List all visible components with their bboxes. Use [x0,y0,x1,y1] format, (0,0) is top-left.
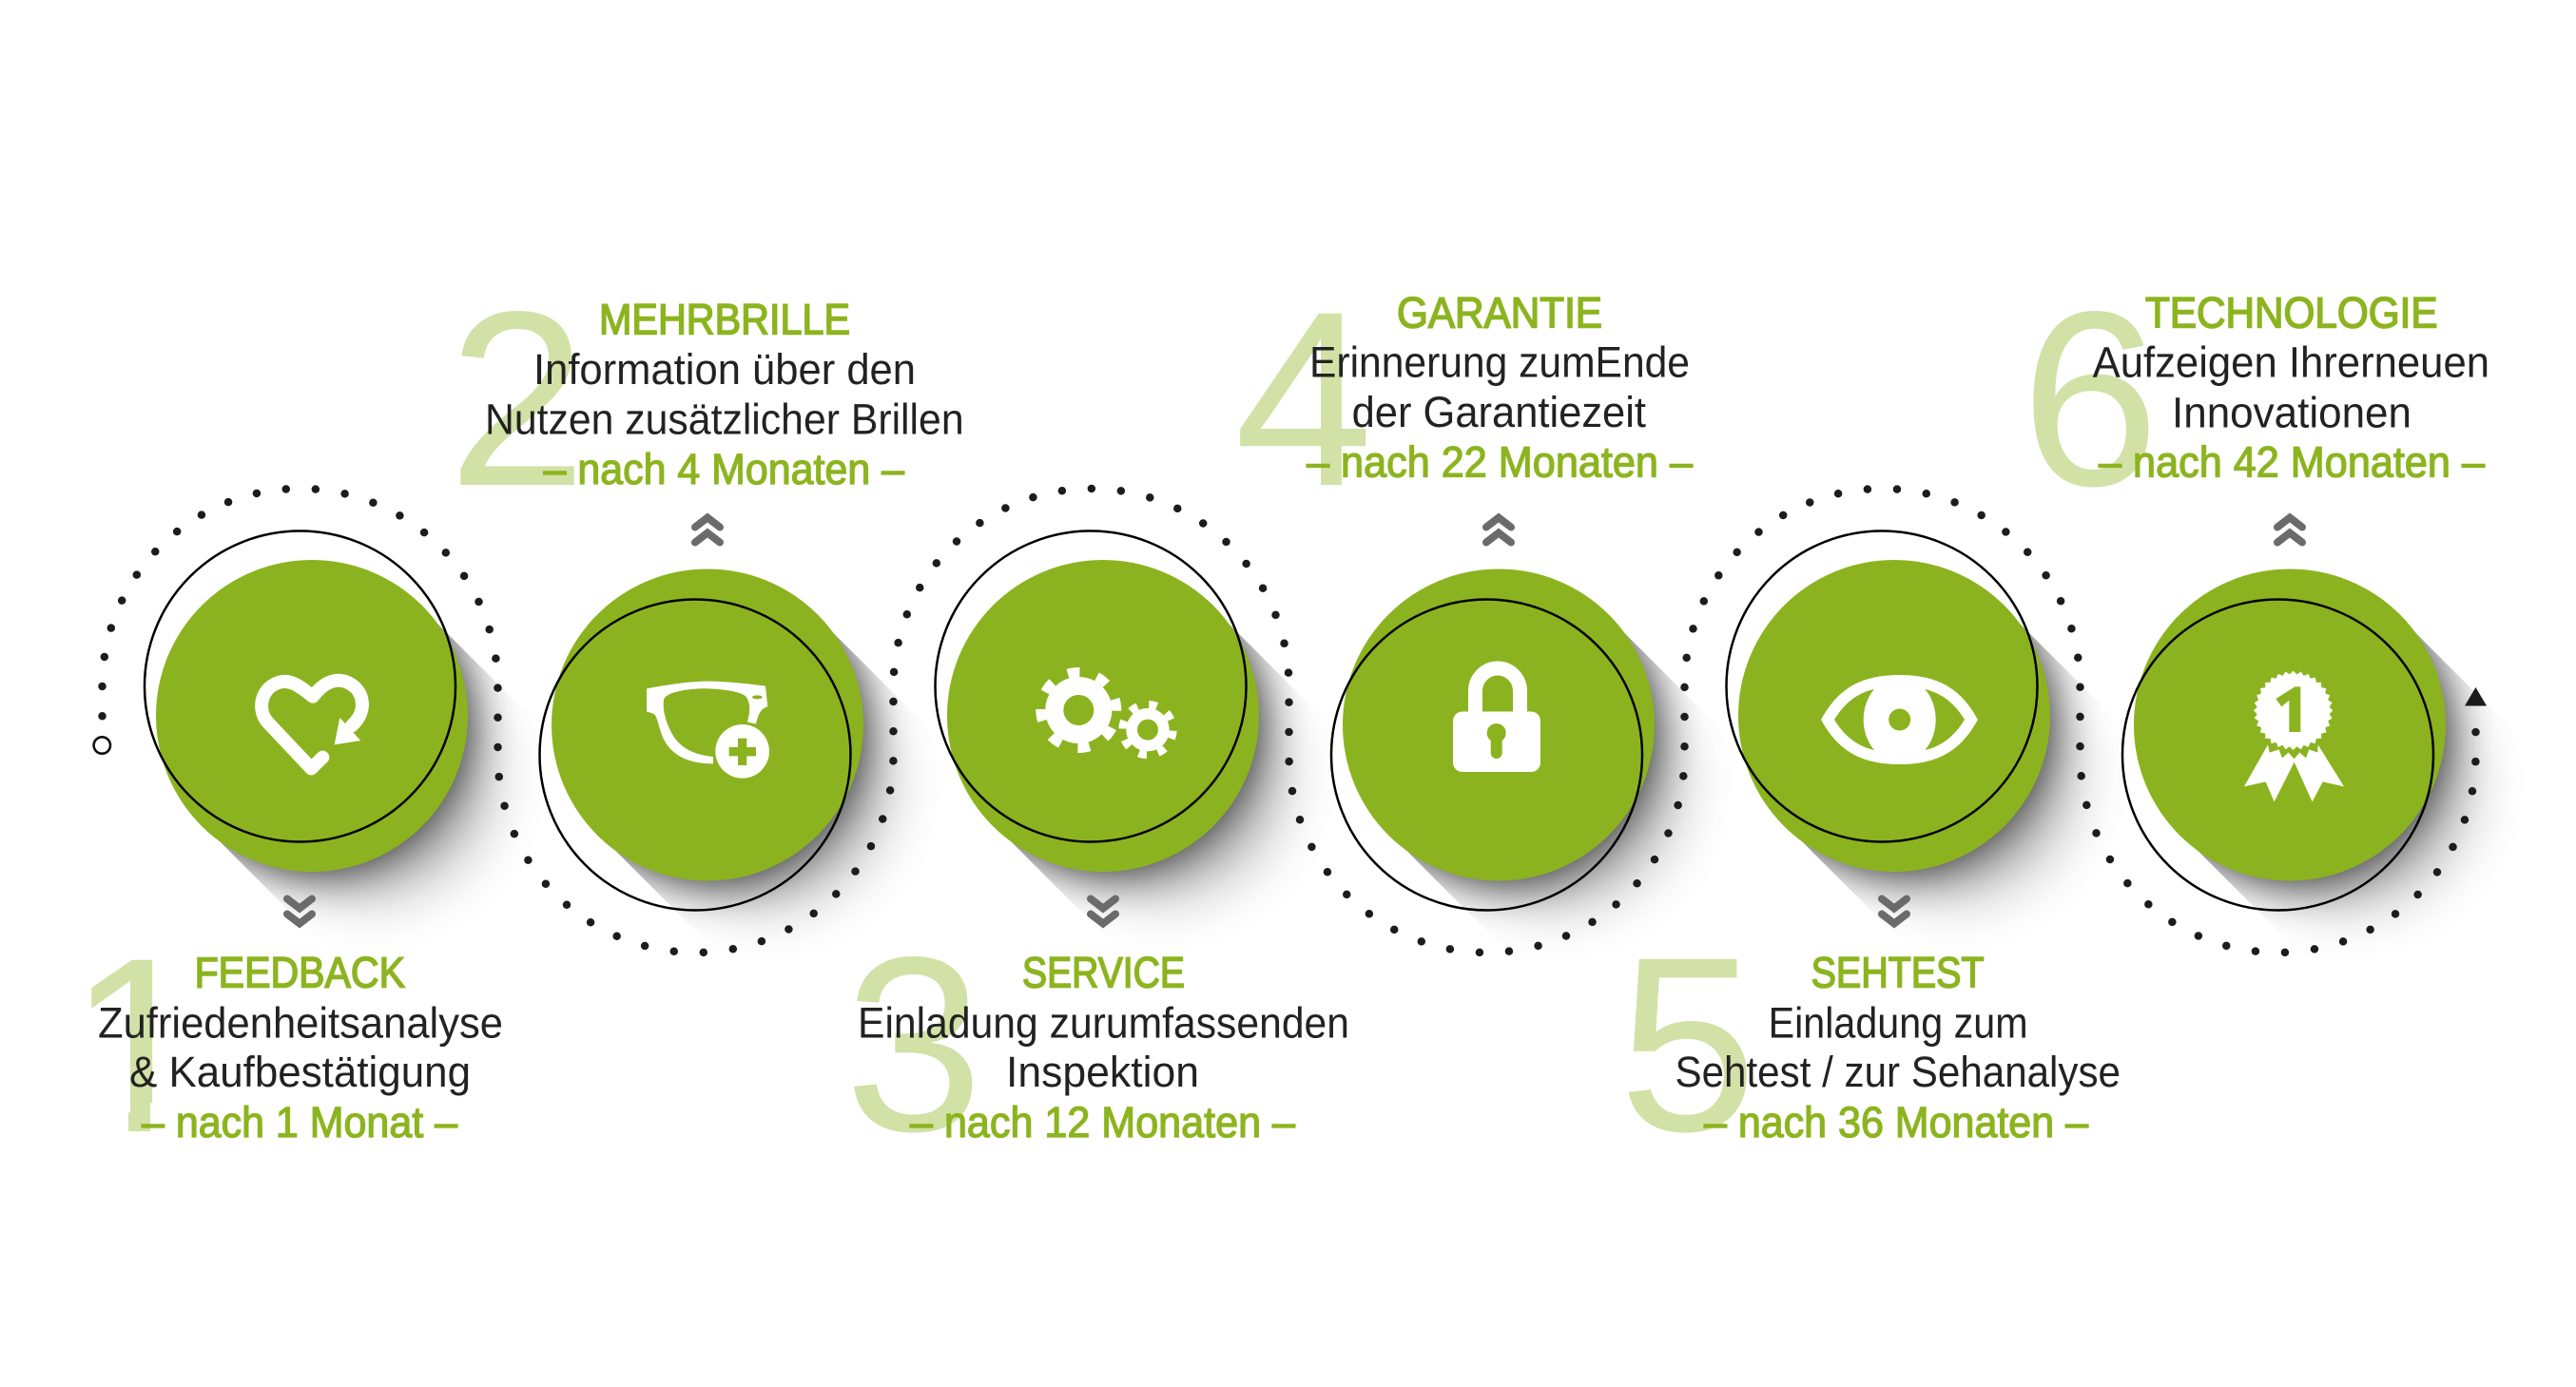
text: feedback line 2: & Kaufbestätigung [129,1048,471,1096]
numeral 3: 3 [844,905,983,1184]
ring 3 [936,530,1246,842]
numeral 6: 6 [2021,260,2160,538]
shadow 6 [2198,633,2499,934]
numeral 5: 5 [1618,905,1757,1184]
icon: padlock [1453,668,1540,772]
shadow 5 [1802,624,2103,926]
step 5: sehtest [1618,530,2121,1184]
timing: nach 22 Monaten: – nach 22 Monaten – [1307,438,1693,487]
green circle 3 [947,560,1259,872]
step 6: technologie [2021,260,2489,911]
arrow: down chevrons [287,899,312,924]
timing: nach 4 Monaten: – nach 4 Monaten – [544,445,904,493]
heading: garantie: GARANTIE [1397,288,1602,337]
text: sehtest line 1: Einladung zum [1769,999,2028,1048]
ring 1 [145,530,455,842]
step 4: garantie [1234,260,1693,911]
arrow: down chevrons [1091,899,1115,924]
heading: service: SERVICE [1022,949,1185,997]
timing: nach 12 Monaten: – nach 12 Monaten – [910,1098,1295,1146]
green circle 4 [1343,568,1655,880]
green circle 2 [552,568,863,880]
text: sehtest line 2: Sehtest / zur Sehanalyse [1675,1048,2121,1096]
heading: technologie: TECHNOLOGIE [2145,289,2438,337]
arrow: up chevrons [1486,517,1511,542]
shadow 3 [1011,624,1312,926]
dotted timeline path [103,489,2476,953]
heading: feedback: FEEDBACK [195,949,405,997]
numeral 1: 1 [68,906,206,1185]
icon: award rosette [2244,671,2344,801]
green circle 5 [1738,560,2050,872]
timeline end arrowhead [2465,687,2487,705]
ring 4 [1331,599,1642,911]
shadow 4 [1406,633,1708,934]
text: technologie line 1: Aufzeigen Ihrerneuen [2093,338,2489,387]
text: garantie line 1: Erinnerung zumEnde [1309,338,1690,387]
step 3: service [844,530,1349,1184]
numeral 2: 2 [448,260,587,538]
timing: nach 1 Monat: – nach 1 Monat – [142,1098,457,1146]
green circle 6 [2134,568,2446,880]
step 2: mehrbrille [448,260,964,911]
ring 2 [540,599,850,911]
icon: gears [1031,663,1174,758]
icon: heart with arrow [261,681,362,768]
text: service line 2: Inspektion [1006,1048,1199,1096]
text: feedback line 1: Zufriedenheitsanalyse [98,999,503,1048]
step 1: feedback [68,530,503,1185]
text: garantie line 2: der Garantiezeit [1352,388,1646,436]
shadow 2 [615,633,917,934]
text: service line 1: Einladung zurumfassenden [858,999,1349,1048]
text: technologie line 2: Innovationen [2172,388,2411,437]
icon: glasses with plus [647,682,769,779]
timing: nach 42 Monaten: – nach 42 Monaten – [2099,438,2485,487]
heading: sehtest: SEHTEST [1811,949,1985,997]
heading: mehrbrille: MEHRBRILLE [599,296,850,344]
arrow: up chevrons [2277,517,2302,542]
ring 5 [1727,530,2037,842]
numeral 4: 4 [1234,260,1373,538]
text: mehrbrille line 1: Information über den [533,345,916,394]
green circle 1 [156,560,468,872]
icon: eye [1828,677,1971,762]
ring 6 [2122,599,2433,911]
timing: nach 36 Monaten: – nach 36 Monaten – [1704,1098,2088,1146]
arrow: up chevrons [695,517,720,542]
shadow 1 [220,624,521,926]
arrow: down chevrons [1882,899,1907,924]
text: mehrbrille line 2: Nutzen zusätzlicher Brillen [485,395,964,444]
timeline start marker [94,737,110,754]
